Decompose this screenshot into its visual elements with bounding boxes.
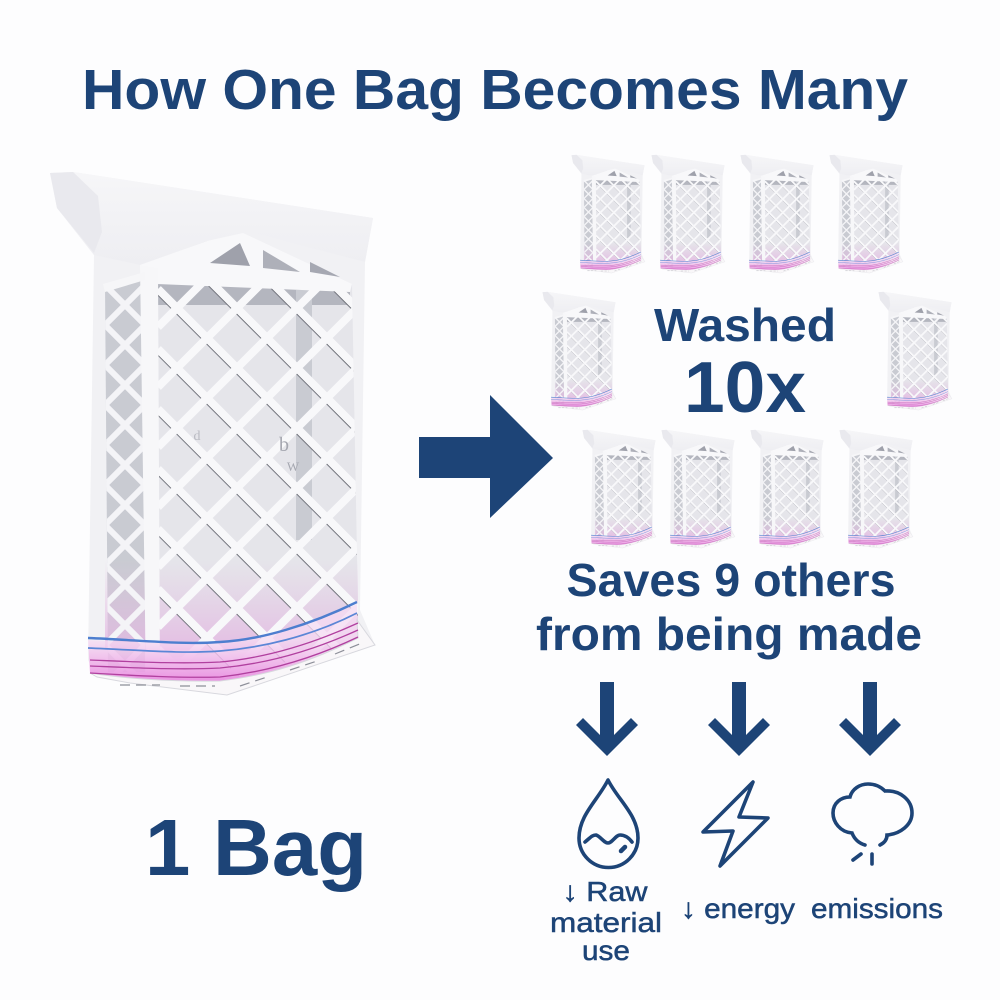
text: Saves 9 others from being made bbox=[536, 554, 922, 660]
label: raw material use: ↓ Raw bbox=[562, 876, 648, 907]
large bag photo: d bbox=[194, 429, 200, 444]
text: 10x: 10x bbox=[684, 348, 806, 428]
label: emissions: emissions bbox=[811, 893, 943, 924]
label: raw material use: use bbox=[582, 935, 630, 966]
label: raw material use bbox=[550, 876, 662, 966]
title: How One Bag Becomes Many bbox=[82, 58, 908, 122]
arrow: one bag to many bbox=[419, 395, 553, 518]
icon: lightning bolt bbox=[703, 782, 768, 866]
large bag photo: W bbox=[287, 459, 300, 474]
arrow: down to energy bbox=[708, 682, 770, 756]
large bag photo bbox=[50, 0, 458, 949]
bottom row of small bags bbox=[582, 389, 932, 605]
icon: water drop bbox=[579, 780, 638, 868]
label: energy: ↓ energy bbox=[681, 893, 795, 924]
text: Washed: Washed bbox=[654, 299, 836, 351]
large bag photo: b bbox=[279, 434, 289, 456]
middle row of small bags bbox=[542, 251, 971, 467]
text: Saves 9 others from being made: Saves 9 others bbox=[566, 554, 896, 606]
arrow: down to emissions bbox=[839, 682, 901, 756]
arrow: down to raw material bbox=[576, 682, 638, 756]
text: Saves 9 others from being made: from being made bbox=[536, 608, 922, 660]
icon: emissions cloud bbox=[833, 784, 912, 864]
top row of small bags bbox=[572, 114, 922, 330]
label: 1 Bag: 1 Bag bbox=[145, 803, 367, 892]
label: raw material use: material bbox=[550, 907, 662, 938]
